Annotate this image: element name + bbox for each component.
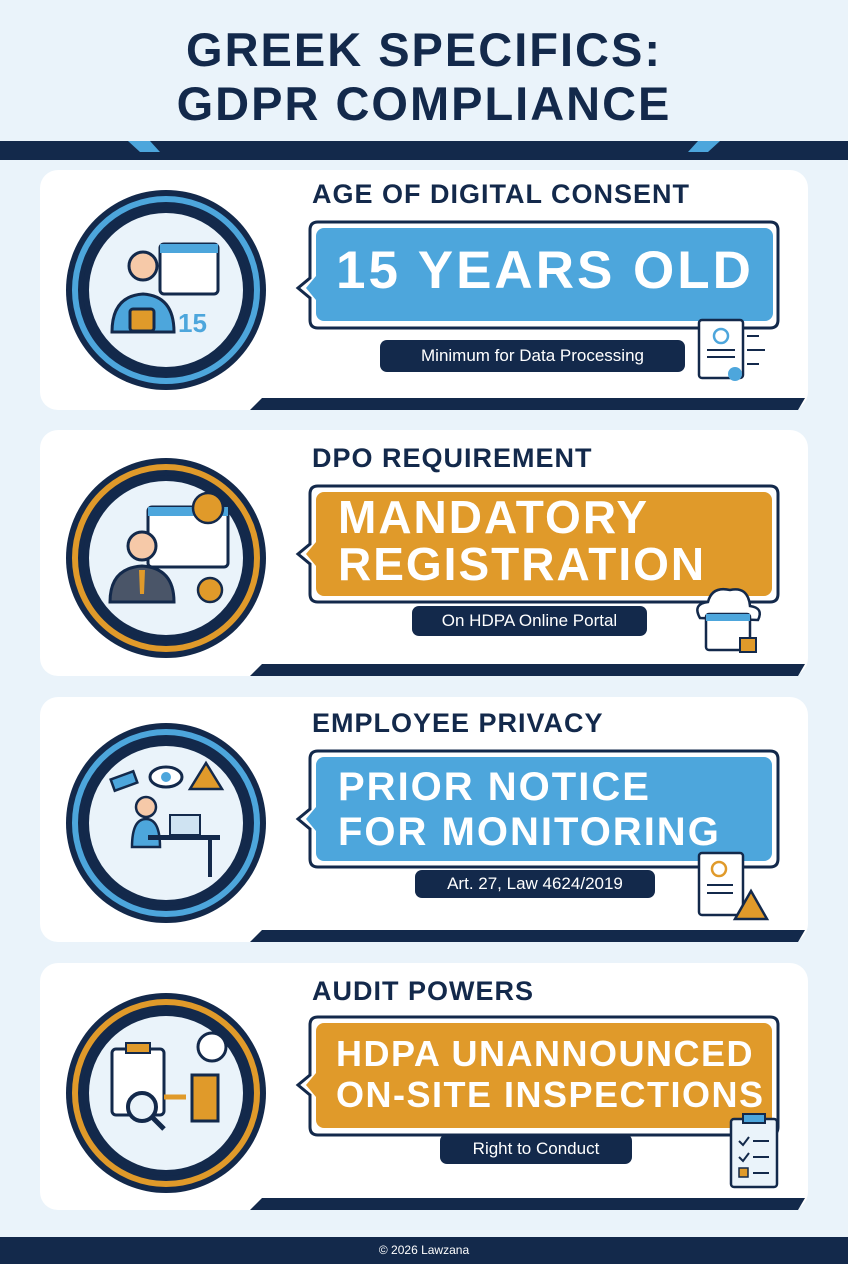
icon: monitoring circle <box>66 723 266 923</box>
big text: MANDATORY <box>338 491 649 543</box>
panel: audit powers <box>40 963 808 1210</box>
footer: © 2026 Lawzana <box>379 1243 469 1257</box>
big text <box>338 491 706 590</box>
pill <box>380 340 685 372</box>
icon: cloud lock <box>696 588 761 653</box>
pill: On HDPA Online Portal <box>442 611 617 630</box>
footer <box>0 1237 848 1264</box>
heading: DPO REQUIREMENT <box>312 443 593 473</box>
callout <box>296 1016 780 1136</box>
bottom stripe <box>250 930 805 942</box>
heading: AGE OF DIGITAL CONSENT <box>312 179 690 209</box>
panel: DPO requirement <box>40 430 808 676</box>
big text: REGISTRATION <box>338 538 706 590</box>
pill <box>415 870 655 898</box>
title: GREEK SPECIFICS: <box>186 23 662 76</box>
icon: consent circle <box>66 190 266 390</box>
bottom stripe <box>250 1198 805 1210</box>
icon: document warning <box>698 852 770 920</box>
icon: certificate <box>698 318 765 381</box>
big text: HDPA UNANNOUNCED <box>336 1033 754 1074</box>
callout <box>296 220 780 330</box>
big text <box>336 1033 765 1115</box>
icon: consent circle: 15 <box>178 308 207 338</box>
panel: age of digital consent <box>40 170 808 410</box>
big text <box>338 765 721 854</box>
pill <box>412 606 647 636</box>
pill: Minimum for Data Processing <box>421 346 644 365</box>
panel: employee privacy <box>40 697 808 942</box>
callout <box>296 484 780 604</box>
heading: EMPLOYEE PRIVACY <box>312 708 604 738</box>
big text: ON-SITE INSPECTIONS <box>336 1074 765 1115</box>
icon: DPO circle <box>66 458 266 658</box>
pill: Art. 27, Law 4624/2019 <box>447 874 623 893</box>
big text: 15 YEARS OLD <box>336 241 754 300</box>
bottom stripe <box>250 664 805 676</box>
title <box>177 23 671 130</box>
bottom stripe <box>250 398 805 410</box>
title: GDPR COMPLIANCE <box>177 77 671 130</box>
heading: AUDIT POWERS <box>312 976 534 1006</box>
pill: Right to Conduct <box>473 1139 599 1158</box>
big text: PRIOR NOTICE <box>338 765 651 809</box>
pill <box>440 1134 632 1164</box>
big text: FOR MONITORING <box>338 810 721 854</box>
header band <box>0 141 848 160</box>
icon: audit circle <box>66 993 266 1193</box>
icon: checklist <box>730 1113 778 1188</box>
callout <box>296 750 780 868</box>
